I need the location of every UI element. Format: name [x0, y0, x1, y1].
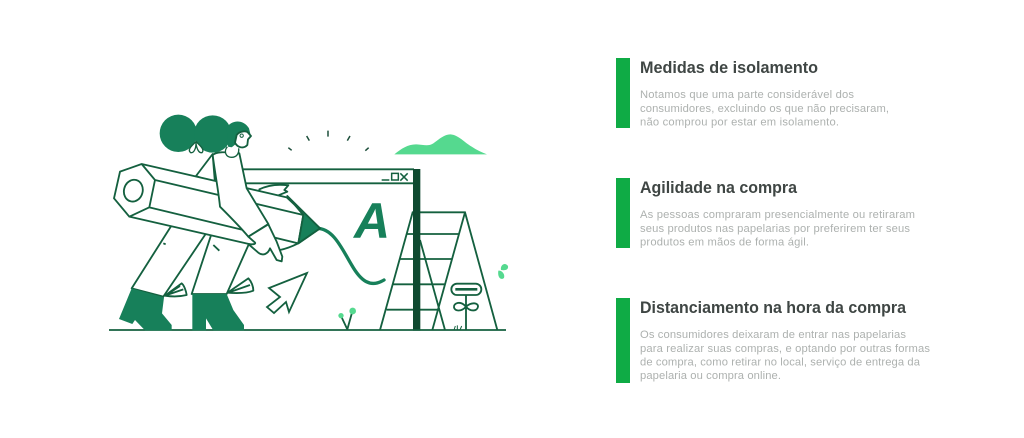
- body text: consumidores, excluindo os que não precisaram,: [640, 103, 889, 115]
- body text: para realizar suas compras, e optando por outras formas: [640, 343, 930, 355]
- foreground cursor: [267, 273, 307, 313]
- browser window: [243, 169, 414, 183]
- ladder: [380, 212, 497, 330]
- letter A: A: [352, 193, 390, 249]
- scenery: window, ladder and plants: [109, 131, 508, 331]
- upper hand: [259, 185, 288, 197]
- mountain: [394, 134, 487, 154]
- leaves: [498, 264, 508, 279]
- illustration: woman carrying a giant pencil: [109, 115, 508, 331]
- shoe fans: [165, 278, 253, 296]
- collar: [225, 147, 239, 157]
- body text: seus produtos nas papelarias por preferirem ter seus: [640, 223, 910, 235]
- heading: Agilidade na compra: [640, 179, 798, 197]
- small sprout: [338, 308, 356, 329]
- accent bar: [616, 58, 630, 128]
- hair tie: [189, 142, 203, 153]
- hair: [160, 115, 251, 153]
- block: Agilidade na compra: [616, 178, 915, 248]
- body text: [640, 329, 930, 382]
- body text: papelaria ou compra online.: [640, 370, 781, 382]
- body text: [640, 89, 889, 128]
- heading: Medidas de isolamento: [640, 59, 818, 77]
- body text: de compra, como retirar no local, serviço de entrega da: [640, 356, 921, 368]
- body text: As pessoas compraram presencialmente ou retiraram: [640, 209, 915, 221]
- heading: Distanciamento na hora da compra: [640, 299, 907, 317]
- torso: [213, 152, 268, 237]
- block: Medidas de isolamento: [616, 58, 889, 128]
- block: Distanciamento na hora da compra: [616, 298, 930, 383]
- sun rays: [288, 131, 369, 151]
- woman: [114, 115, 320, 330]
- boots: [119, 288, 244, 330]
- ground line: [109, 327, 506, 333]
- window post: [413, 169, 420, 331]
- legs: [132, 220, 251, 297]
- sign plant: [451, 284, 481, 330]
- pencil: [114, 164, 320, 250]
- ink squiggle: [317, 228, 384, 283]
- accent bar: [616, 298, 630, 383]
- accent bar: [616, 178, 630, 248]
- body text: Os consumidores deixaram de entrar nas papelarias: [640, 329, 906, 341]
- face: [235, 131, 251, 147]
- back arm: [196, 154, 215, 183]
- body text: [640, 209, 915, 248]
- hand: [248, 224, 282, 261]
- body text: Notamos que uma parte considerável dos: [640, 89, 854, 101]
- body text: não comprou por estar em isolamento.: [640, 116, 839, 128]
- body text: produtos em mãos de forma ágil.: [640, 236, 809, 248]
